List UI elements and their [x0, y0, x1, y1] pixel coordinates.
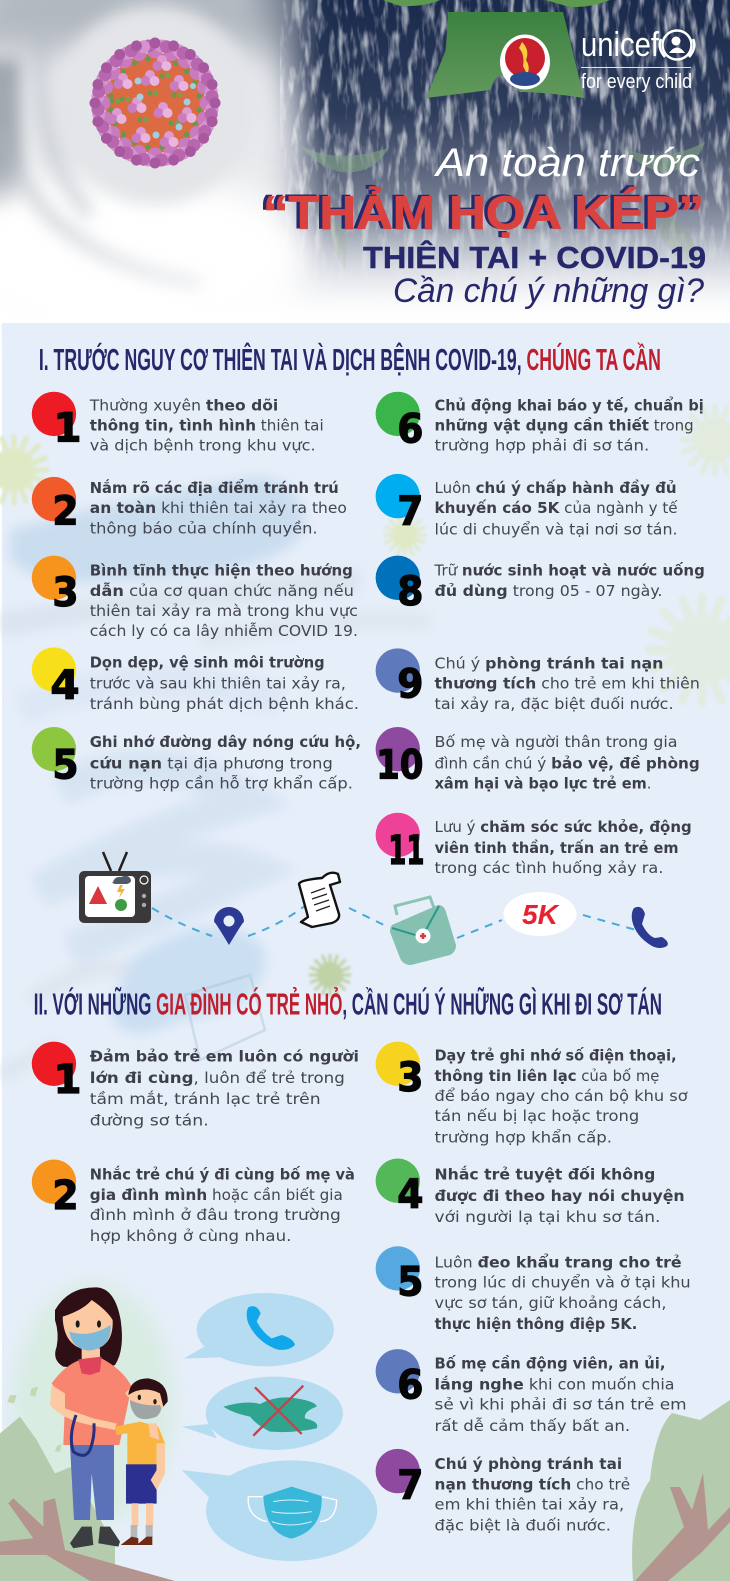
item 1.7: 7 — [397, 487, 423, 534]
item 1.5: Ghi nhớ đường dây nóng cứu hộ, — [90, 734, 361, 751]
item 2.5: Luôn đeo khẩu trang cho trẻ — [435, 1254, 682, 1271]
item 2.5: trong lúc di chuyển và ở tại khu — [435, 1275, 691, 1292]
item 2.7: nạn thương tích cho trẻ — [435, 1476, 630, 1493]
item 1.9: thương tích cho trẻ em khi thiên — [435, 676, 700, 693]
item 1.4: Dọn dẹp, vệ sinh môi trường — [90, 654, 325, 671]
item 1.11: viên tinh thần, trấn an trẻ em — [435, 840, 679, 857]
icon: telephone — [632, 907, 668, 948]
title block — [260, 141, 706, 310]
item 2.5: thực hiện thông điệp 5K. — [435, 1316, 637, 1333]
item 1.5: 5 — [52, 741, 79, 788]
item 1.3: dẫn của cơ quan chức năng nếu — [90, 583, 354, 600]
item 2.1: tầm mắt, tránh lạc trẻ trên — [90, 1091, 321, 1108]
item 2.3: trường hợp khẩn cấp. — [435, 1129, 612, 1146]
item 1.10: 10 — [376, 741, 423, 788]
title line: Thảm họa kép: “THẢM HỌA KÉP” — [263, 186, 704, 239]
header photo: typhoon and satellite background — [0, 0, 730, 300]
item 1.1: 1 — [53, 405, 82, 452]
badge: 5K: 5K — [522, 899, 560, 930]
item 2.7: Chú ý phòng tránh tai — [435, 1456, 622, 1473]
item 1.3: Bình tĩnh thực hiện theo hướng — [90, 563, 353, 580]
item 1.1: và dịch bệnh trong khu vực. — [90, 438, 316, 455]
icon: coronavirus — [89, 37, 221, 169]
item 1.3: thiên tai xảy ra mà trong khu vực — [90, 603, 358, 620]
item 1.3: 3 — [52, 569, 79, 616]
item 1.6: 6 — [397, 406, 423, 453]
badge: 5K — [504, 892, 576, 936]
item 1.7: Luôn chú ý chấp hành đầy đủ — [435, 480, 677, 497]
item 2.1: đường sơ tán. — [90, 1112, 209, 1129]
speech bubble: no water — [182, 1377, 343, 1450]
item 2.1 — [32, 1042, 359, 1129]
item 2.4: 4 — [397, 1171, 423, 1218]
item 1.7 — [376, 474, 679, 538]
item 1.2: Nắm rõ các địa điểm tránh trú — [90, 480, 339, 497]
item 2.5 — [376, 1246, 691, 1333]
item 1.10: Bố mẹ và người thân trong gia — [435, 734, 678, 751]
item 2.7 — [376, 1449, 630, 1535]
item 1.1: Thường xuyên theo dõi — [89, 397, 278, 414]
child — [115, 1378, 168, 1545]
item 1.8: Trữ nước sinh hoạt và nước uống — [434, 563, 705, 580]
item 1.11: Lưu ý chăm sóc sức khỏe, động — [435, 819, 692, 836]
item 2.4: với người lạ tại khu sơ tán. — [435, 1209, 660, 1226]
item 1.6: Chủ động khai báo y tế, chuẩn bị — [435, 397, 704, 414]
item 2.2: Nhắc trẻ chú ý đi cùng bố mẹ và — [90, 1167, 355, 1184]
logo: ministry emblem — [500, 34, 550, 90]
item 1.5 — [32, 727, 361, 792]
item 1.9: tai xảy ra, đặc biệt đuối nước. — [435, 696, 674, 713]
speech bubble: phone — [184, 1293, 334, 1366]
logo: unicef — [581, 26, 694, 93]
icon: document scroll — [299, 873, 340, 927]
decorative pale green viruses — [0, 407, 730, 995]
item 1.3: cách ly có ca lây nhiễm COVID 19. — [90, 623, 358, 640]
illustration: right tree — [632, 1400, 730, 1581]
item 2.6 — [376, 1349, 687, 1435]
item 2.4: Nhắc trẻ tuyệt đối không — [435, 1167, 655, 1184]
item 1.6: trường hợp phải đi sơ tán. — [435, 438, 649, 455]
item 1.1: thông tin, tình hình thiên tai — [90, 418, 324, 435]
mother — [50, 1287, 140, 1548]
item 2.5: 5 — [397, 1259, 423, 1306]
item 2.4 — [376, 1159, 685, 1226]
item 1.10: xâm hại và bạo lực trẻ em. — [435, 775, 651, 792]
item 2.6: 6 — [397, 1362, 423, 1409]
title line: Thảm họa kép: “THẢM HỌA KÉP” — [260, 185, 701, 238]
item 2.3: tán nếu bị lạc hoặc trong — [435, 1108, 639, 1125]
item 1.10 — [376, 727, 700, 792]
item 1.5: trường hợp cần hỗ trợ khẩn cấp. — [90, 775, 353, 792]
item 1.11: 11 — [388, 827, 424, 874]
speech bubble: mask — [182, 1460, 377, 1561]
item 2.6: sẻ vì khi phải đi sơ tán trẻ em — [435, 1397, 687, 1414]
item 2.3: thông tin liên lạc của bố mẹ — [435, 1068, 659, 1085]
icon row: dashed connectors — [152, 905, 636, 938]
item 2.1: 1 — [53, 1056, 82, 1103]
item 1.8 — [376, 556, 705, 615]
glow — [13, 1283, 173, 1523]
item 1.2: thông báo của chính quyền. — [90, 520, 318, 537]
item 1.9: 9 — [397, 661, 423, 708]
icon: medical bag — [390, 897, 456, 965]
icon: location pin — [214, 907, 244, 945]
item 1.9 — [376, 648, 700, 713]
item 1.8: 8 — [397, 568, 423, 615]
item 1.4: tránh bùng phát dịch bệnh khác. — [90, 696, 359, 713]
item 2.5: vực sơ tán, giữ khoảng cách, — [435, 1295, 666, 1312]
item 1.10: đình cần chú ý bảo vệ, đề phòng — [435, 755, 700, 772]
item 2.2: hợp không ở cùng nhau. — [90, 1228, 291, 1245]
item 1.3 — [32, 556, 358, 640]
item 1.11: trong các tình huống xảy ra. — [435, 860, 663, 877]
item 1.9: Chú ý phòng tránh tai nạn — [435, 656, 663, 673]
item 1.4: trước và sau khi thiên tai xảy ra, — [90, 676, 346, 693]
item 1.8: đủ dùng trong 05 - 07 ngày. — [435, 583, 662, 600]
item 1.2: 2 — [52, 487, 79, 534]
item 1.7: lúc di chuyển và tại nơi sơ tán. — [435, 521, 678, 538]
item 2.7: 7 — [397, 1461, 423, 1508]
item 2.3: Dạy trẻ ghi nhớ số điện thoại, — [435, 1048, 677, 1065]
item 1.6 — [376, 392, 704, 455]
item 1.4: 4 — [50, 662, 80, 709]
panel: light blue content background — [0, 323, 730, 1581]
item 2.2: 2 — [52, 1172, 79, 1219]
logo: unicef: unicef — [581, 26, 659, 64]
item 2.3: 3 — [397, 1054, 423, 1101]
item 2.7: đặc biệt là đuối nước. — [435, 1518, 611, 1535]
item 2.2: gia đình mình hoặc cần biết gia — [90, 1187, 343, 1204]
item 2.7: em khi thiên tai xảy ra, — [435, 1496, 624, 1513]
title line: Cần chú ý những gì: Cần chú ý những gì? — [393, 272, 704, 310]
item 2.4: được đi theo hay nói chuyện — [435, 1188, 685, 1205]
item 2.2: đình mình ở đâu trong trường — [90, 1207, 341, 1224]
item 2.6: lắng nghe khi con muốn chia — [435, 1376, 675, 1393]
title line: An toàn trước: An toàn trước — [434, 141, 700, 185]
icon: television — [79, 852, 151, 923]
item 2.1: lớn đi cùng , luôn để trẻ trong — [90, 1070, 345, 1087]
item 1.11 — [376, 813, 692, 877]
logo: unicef: for every child — [581, 71, 692, 93]
item 2.3 — [376, 1042, 688, 1146]
item 2.2 — [32, 1160, 355, 1245]
content: all text and numbered items — [32, 343, 705, 1535]
item 1.6: những vật dụng cần thiết trong — [435, 418, 694, 435]
item 1.4 — [32, 647, 359, 713]
item 2.1: Đảm bảo trẻ em luôn có người — [90, 1049, 359, 1066]
item 2.6: Bố mẹ cần động viên, an ủi, — [435, 1355, 665, 1372]
item 1.2: an toàn khi thiên tai xảy ra theo — [90, 500, 347, 517]
illustration: mother, child and speech bubbles — [0, 1283, 377, 1581]
title line: Thiên tai + Covid-19: THIÊN TAI + COVID-19 — [363, 239, 706, 275]
left tree — [0, 1387, 175, 1581]
item 1.5: cứu nạn tại địa phương trong — [90, 755, 333, 772]
item 2.3: để báo ngay cho cán bộ khu sơ — [435, 1088, 688, 1105]
item 1.1 — [32, 392, 324, 455]
item 2.6: rất dễ cảm thấy bất an. — [435, 1418, 630, 1435]
item 1.2 — [32, 477, 347, 537]
item 1.7: khuyến cáo 5K của ngành y tế — [435, 500, 679, 517]
